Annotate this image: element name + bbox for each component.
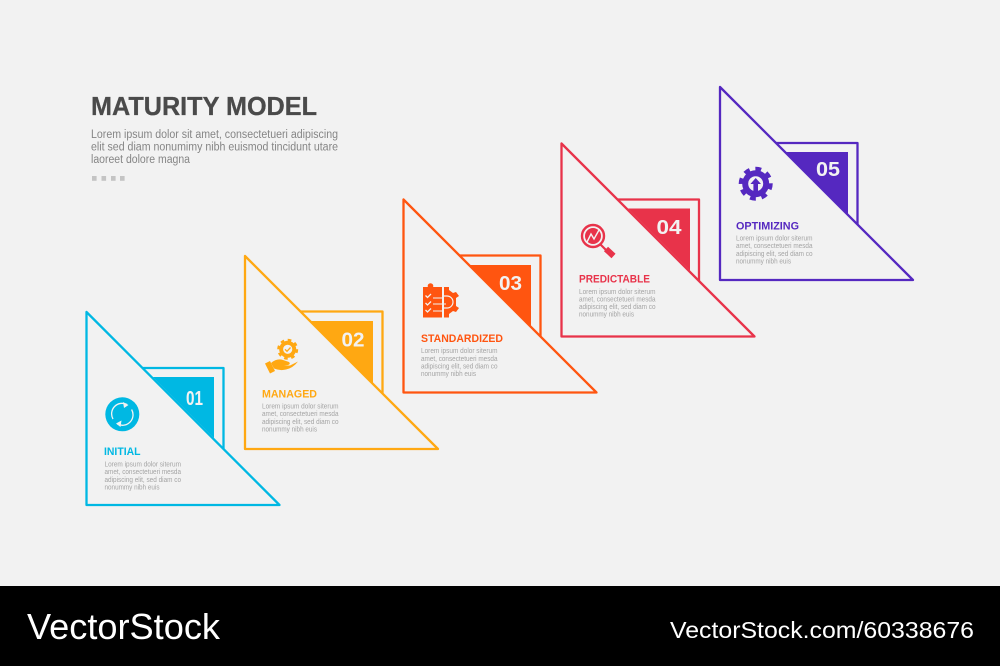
description: amet, consectetueri mesda <box>579 296 656 304</box>
description: adipiscing elit, sed diam co <box>579 304 656 311</box>
icon: magnifier with chart <box>582 225 614 256</box>
label: OPTIMIZING <box>736 220 799 232</box>
intro text: laoreet dolore magna <box>91 154 191 166</box>
number: 04 <box>656 217 682 239</box>
number: 03 <box>499 273 522 295</box>
description <box>736 236 813 265</box>
panel: 04 predictable <box>562 144 754 336</box>
intro text: elit sed diam nonumimy nibh euismod tincidunt utare <box>91 142 338 154</box>
description: Lorem ipsum dolor siterum <box>104 462 181 468</box>
description: Lorem ipsum dolor siterum <box>736 236 813 242</box>
description: adipiscing elit, sed diam co <box>736 251 813 258</box>
description: amet, consectetueri mesda <box>104 469 181 476</box>
logo text: VectorStock <box>27 606 221 647</box>
icon: refresh cycle <box>105 397 139 431</box>
triangle outline <box>404 200 596 392</box>
description: amet, consectetueri mesda <box>421 356 498 363</box>
triangle outline <box>245 256 438 449</box>
square outline <box>618 200 699 280</box>
triangle outline <box>562 144 754 336</box>
description: amet, consectetueri mesda <box>736 243 813 250</box>
image id text: VectorStock.com/60338676 <box>670 617 974 643</box>
description: nonummy nibh euis <box>262 426 317 433</box>
icon: gear with up arrow <box>741 169 771 199</box>
pagination dots <box>92 176 125 181</box>
description: amet, consectetueri mesda <box>262 411 339 418</box>
description: Lorem ipsum dolor siterum <box>421 348 498 355</box>
number tab <box>469 265 531 327</box>
label: PREDICTABLE <box>579 274 650 286</box>
square outline <box>459 256 540 337</box>
description: adipiscing elit, sed diam co <box>421 364 498 370</box>
number: 01 <box>186 388 203 410</box>
description <box>104 462 181 491</box>
number tab <box>311 321 373 383</box>
footer band <box>0 586 1000 666</box>
square outline <box>301 312 382 393</box>
intro text <box>91 129 338 166</box>
number tab <box>628 208 690 270</box>
description: adipiscing elit, sed diam co <box>104 477 181 484</box>
icon: hand with gear <box>265 340 298 374</box>
heading block <box>91 91 338 181</box>
description: nonummy nibh euis <box>421 371 476 378</box>
icon: clipboard and gear <box>423 283 459 318</box>
label: STANDARDIZED <box>421 333 503 345</box>
label: MANAGED <box>262 388 317 400</box>
title: MATURITY MODEL <box>91 91 317 121</box>
description <box>421 348 498 378</box>
panel: 03 standardized <box>404 200 596 392</box>
panel: 05 optimizing <box>720 87 913 280</box>
description: adipiscing elit, sed diam co <box>262 419 339 426</box>
description <box>262 404 339 433</box>
panel: 01 initial <box>86 312 280 505</box>
description <box>579 289 656 319</box>
intro text: Lorem ipsum dolor sit amet, consectetueri adipiscing <box>91 129 338 141</box>
description: Lorem ipsum dolor siterum <box>579 289 656 296</box>
triangle outline <box>720 87 913 280</box>
square outline <box>143 368 224 449</box>
square outline <box>776 143 858 224</box>
description: nonummy nibh euis <box>579 312 634 319</box>
description: nonummy nibh euis <box>736 258 791 265</box>
description: Lorem ipsum dolor siterum <box>262 404 339 410</box>
number tab <box>153 377 214 438</box>
number: 05 <box>816 159 840 181</box>
number: 02 <box>342 330 364 352</box>
description: nonummy nibh euis <box>104 484 160 491</box>
number tab <box>786 152 848 214</box>
triangle outline <box>86 312 280 505</box>
panel: 02 managed <box>245 256 438 449</box>
label: INITIAL <box>104 446 141 458</box>
